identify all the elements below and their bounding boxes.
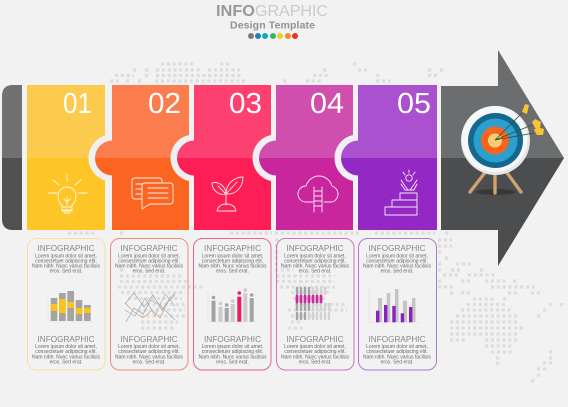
title: INFO bbox=[216, 3, 255, 20]
lower text block: Lorem ipsum dolor sit amet, bbox=[202, 344, 263, 350]
number 01: 01 bbox=[63, 88, 92, 120]
text block: Nam nibh. Nunc varius facilisis bbox=[32, 264, 101, 270]
lower heading: INFOGRAPHIC bbox=[204, 334, 261, 344]
colour dots bbox=[248, 33, 298, 39]
text block bbox=[198, 254, 267, 274]
text block: eros. Sed erat. bbox=[133, 268, 165, 274]
text block: Lorem ipsum dolor sit amet, bbox=[202, 254, 263, 260]
text block bbox=[281, 254, 350, 274]
lower text block bbox=[281, 344, 350, 366]
heading: INFOGRAPHIC bbox=[368, 243, 426, 253]
subtitle: Design Template bbox=[230, 20, 315, 32]
text block: consectetuer adipiscing elit. bbox=[118, 258, 180, 264]
text block: Lorem ipsum dolor sit amet, bbox=[35, 254, 97, 260]
lower text block: Nam nibh. Nunc varius facilisis bbox=[32, 354, 101, 360]
lower text block: Nam nibh. Nunc varius facilisis bbox=[363, 354, 432, 360]
text block bbox=[363, 254, 432, 274]
lower text block: consectetuer adipiscing elit. bbox=[118, 349, 180, 355]
heading: INFOGRAPHIC bbox=[38, 243, 94, 253]
text block: eros. Sed erat. bbox=[50, 268, 82, 274]
lower text block: eros. Sed erat. bbox=[299, 360, 331, 366]
number 04: 04 bbox=[310, 88, 344, 120]
text block: Nam nibh. Nunc varius facilisis bbox=[115, 264, 184, 270]
lower text block: consectetuer adipiscing elit. bbox=[35, 349, 97, 355]
icon: person on stairs bbox=[385, 170, 417, 215]
icon: speech bubbles bbox=[132, 178, 173, 209]
heading: INFOGRAPHIC bbox=[204, 243, 261, 253]
number 03: 03 bbox=[229, 88, 262, 120]
lower text block: Lorem ipsum dolor sit amet, bbox=[284, 344, 346, 350]
card 2 bbox=[110, 238, 188, 370]
lower text block: Nam nibh. Nunc varius facilisis bbox=[281, 354, 350, 360]
panel 02 bbox=[88, 85, 189, 230]
lower text block bbox=[115, 344, 184, 366]
card 3 bbox=[194, 238, 271, 370]
heading: INFOGRAPHIC bbox=[286, 243, 344, 253]
stacked bar chart bbox=[48, 291, 94, 322]
icon: sprout bbox=[212, 177, 243, 211]
card 4 bbox=[276, 238, 354, 370]
text block: Lorem ipsum dolor sit amet, bbox=[284, 254, 346, 260]
panel 01 bbox=[27, 85, 105, 230]
lower heading: INFOGRAPHIC bbox=[368, 334, 426, 344]
paired bar chart bbox=[369, 288, 420, 322]
lower heading: INFOGRAPHIC bbox=[286, 334, 344, 344]
line chart bbox=[125, 293, 175, 322]
card 1 bbox=[28, 238, 105, 370]
lower text block: eros. Sed erat. bbox=[216, 360, 249, 366]
title: GRAPHIC bbox=[255, 3, 328, 20]
panel 03 bbox=[170, 85, 271, 230]
pictogram chart bbox=[297, 288, 329, 319]
lower text block bbox=[363, 344, 432, 366]
lower text block: consectetuer adipiscing elit. bbox=[366, 349, 428, 355]
icon: light bulb bbox=[48, 174, 87, 213]
lower text block: Lorem ipsum dolor sit amet, bbox=[118, 344, 180, 350]
stand shadow bbox=[476, 189, 516, 195]
text block: Nam nibh. Nunc varius facilisis bbox=[198, 264, 267, 270]
lower text block: consectetuer adipiscing elit. bbox=[284, 349, 346, 355]
text block: eros. Sed erat. bbox=[299, 268, 331, 274]
text block: Nam nibh. Nunc varius facilisis bbox=[281, 264, 350, 270]
arrow tail: grey block bbox=[2, 85, 22, 230]
arrow head bbox=[441, 50, 564, 266]
text block: eros. Sed erat. bbox=[381, 268, 413, 274]
text block: consectetuer adipiscing elit. bbox=[284, 258, 346, 264]
text block: eros. Sed erat. bbox=[216, 268, 249, 274]
number 05: 05 bbox=[397, 88, 431, 120]
lower text block: consectetuer adipiscing elit. bbox=[202, 349, 263, 355]
lower text block: Nam nibh. Nunc varius facilisis bbox=[115, 354, 184, 360]
number 02: 02 bbox=[148, 88, 181, 120]
lower text block bbox=[32, 344, 101, 366]
lower heading: INFOGRAPHIC bbox=[38, 334, 94, 344]
text block: consectetuer adipiscing elit. bbox=[366, 258, 428, 264]
panel 05 bbox=[334, 85, 437, 230]
text block: Nam nibh. Nunc varius facilisis bbox=[363, 264, 432, 270]
text block: consectetuer adipiscing elit. bbox=[202, 258, 263, 264]
target on stand bbox=[461, 104, 544, 195]
title bbox=[216, 3, 328, 20]
lower text block: Lorem ipsum dolor sit amet, bbox=[35, 344, 97, 350]
text block: Lorem ipsum dolor sit amet, bbox=[366, 254, 428, 260]
target rings bbox=[461, 106, 530, 175]
lower text block: eros. Sed erat. bbox=[381, 360, 413, 366]
lower text block: Nam nibh. Nunc varius facilisis bbox=[198, 354, 267, 360]
bar chart with pink highlight bbox=[208, 288, 256, 322]
arrows in target bbox=[495, 104, 544, 140]
lower text block: Lorem ipsum dolor sit amet, bbox=[366, 344, 428, 350]
card 5 bbox=[358, 238, 436, 370]
heading: INFOGRAPHIC bbox=[120, 243, 178, 253]
text block: Lorem ipsum dolor sit amet, bbox=[118, 254, 180, 260]
lower text block bbox=[198, 344, 267, 366]
icon: cloud with ladder bbox=[298, 176, 338, 212]
lower text block: eros. Sed erat. bbox=[133, 360, 165, 366]
lower text block: eros. Sed erat. bbox=[50, 360, 82, 366]
background world map dots bbox=[68, 64, 564, 381]
stand legs bbox=[470, 170, 521, 193]
text block bbox=[115, 254, 184, 274]
lower heading: INFOGRAPHIC bbox=[120, 334, 178, 344]
text block: consectetuer adipiscing elit. bbox=[35, 258, 97, 264]
text block bbox=[32, 254, 101, 274]
panel 04 bbox=[252, 85, 353, 230]
